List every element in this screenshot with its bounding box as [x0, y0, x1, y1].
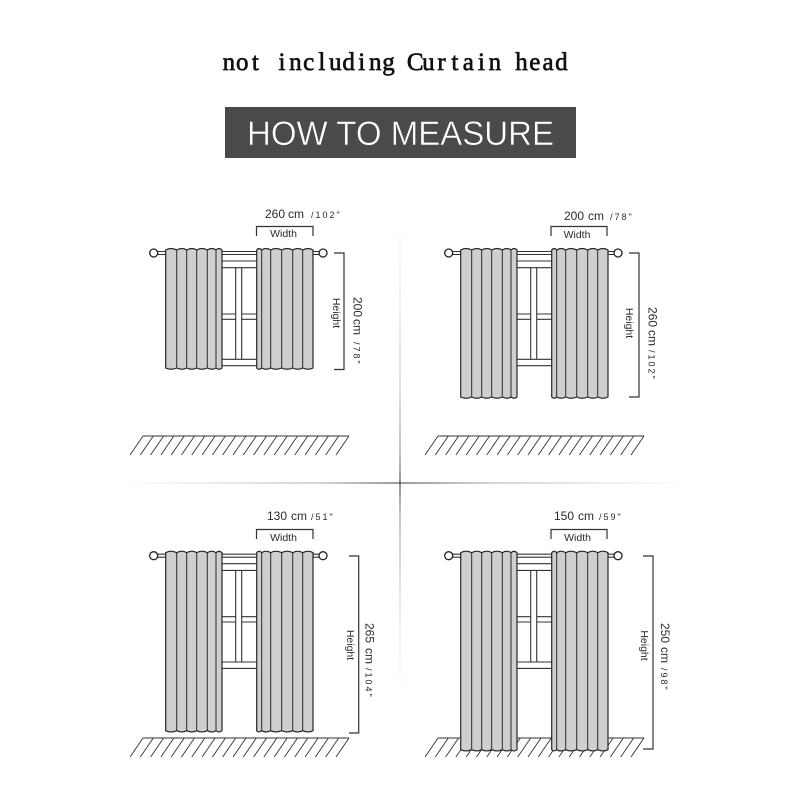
width bracket [551, 530, 607, 544]
width value: 150 [554, 509, 574, 523]
width value: cm [588, 209, 604, 223]
curtain drawing [150, 248, 327, 369]
width value: cm [288, 207, 304, 221]
height value: 250 [658, 623, 672, 643]
width value: /78" [610, 212, 634, 222]
width bracket: Width [270, 532, 297, 544]
width value: 260 [265, 207, 285, 221]
height value: 265 [362, 623, 376, 643]
width bracket [551, 226, 607, 241]
divider: vertical [400, 205, 401, 700]
panel: curtain 150 by 250 cm [425, 509, 672, 757]
width value: 130 [267, 509, 287, 523]
height bracket [334, 253, 344, 370]
height value: cm [646, 330, 660, 346]
curtain drawing [150, 551, 327, 732]
width value: /59" [599, 512, 623, 522]
height value: cm [658, 647, 672, 663]
floor [425, 436, 644, 455]
height value: 260 [646, 307, 660, 327]
floor [130, 436, 349, 455]
width bracket: Width [564, 229, 591, 241]
floor [130, 738, 349, 757]
panel: curtain 130 by 265 cm [130, 509, 376, 757]
height value: /102" [646, 350, 656, 381]
width value: 200 [564, 209, 584, 223]
height value: /104" [364, 668, 374, 699]
width value: cm [578, 509, 594, 523]
width value: /51" [311, 512, 335, 522]
width bracket: Width [564, 532, 591, 544]
banner: how to measure [225, 107, 576, 158]
title: not including Curtain head [223, 49, 568, 76]
height label: Height [623, 308, 635, 338]
height bracket [629, 253, 639, 397]
height bracket [349, 556, 359, 733]
height value: /78" [352, 342, 362, 366]
height label: Height [638, 630, 650, 661]
width bracket [256, 530, 313, 544]
height value: cm [362, 648, 376, 664]
height value: 200 [350, 297, 364, 317]
curtain drawing [445, 551, 622, 751]
width bracket: Width [270, 228, 297, 240]
width bracket [256, 226, 313, 240]
width value: /102" [311, 210, 342, 220]
height label: Height [344, 630, 356, 660]
floor [425, 738, 644, 757]
curtain drawing [445, 248, 622, 398]
divider: horizontal [120, 482, 690, 484]
height value: cm [350, 319, 364, 335]
height label: Height [330, 298, 342, 328]
height bracket [643, 556, 653, 749]
banner: how to measure: HOW TO MEASURE [247, 115, 554, 153]
height value: /98" [659, 668, 669, 692]
panel: curtain 260 by 200 cm [130, 207, 364, 455]
panel: curtain 200 by 260 cm [425, 209, 660, 455]
width value: cm [291, 509, 307, 523]
